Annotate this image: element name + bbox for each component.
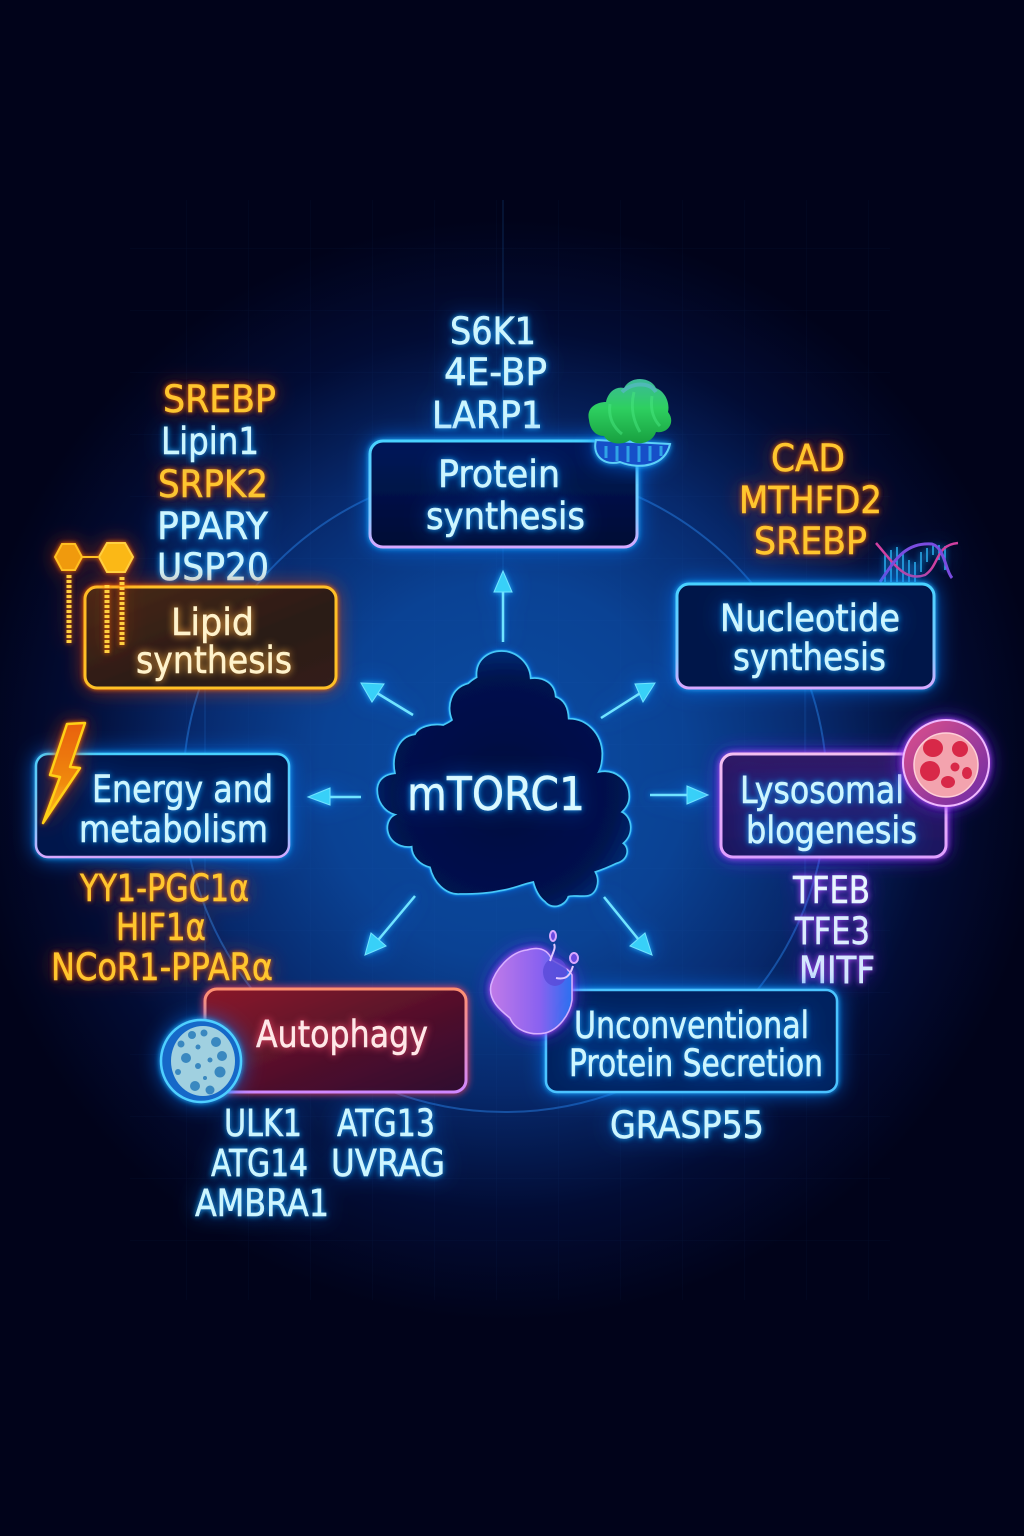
- icon: autophagosome: [161, 1020, 241, 1102]
- lipid synthesis targets: SRPK2: [158, 463, 268, 506]
- protein synthesis targets: LARP1: [432, 394, 543, 437]
- lipid synthesis targets: SREBP: [163, 378, 276, 421]
- arrow to protein synthesis: [494, 571, 512, 642]
- hub label: mTORC1: [407, 767, 585, 821]
- autophagy targets: UVRAG: [331, 1142, 445, 1185]
- panel: protein synthesis: [370, 310, 671, 547]
- lysosomal targets: [792, 869, 875, 992]
- energy targets: NCoR1-PPARα: [51, 946, 273, 989]
- arrow to autophagy: [365, 896, 415, 955]
- autophagy heading: Autophagy: [256, 1013, 428, 1056]
- nucleotide synthesis targets: SREBP: [754, 520, 867, 563]
- protein synthesis targets: 4E-BP: [444, 351, 547, 394]
- icon: lipid molecule: [55, 543, 133, 655]
- energy heading: [79, 768, 273, 851]
- autophagy targets: ATG14: [211, 1142, 308, 1185]
- panel: nucleotide synthesis: [677, 437, 958, 688]
- protein synthesis heading: [426, 453, 585, 538]
- protein synthesis heading: synthesis: [426, 495, 585, 538]
- nucleotide synthesis box: [677, 584, 934, 688]
- autophagy box: [205, 989, 466, 1092]
- secretion target: GRASP55: [610, 1104, 764, 1147]
- panel: lipid synthesis: [55, 378, 336, 688]
- nucleotide synthesis heading: [720, 597, 900, 679]
- lipid synthesis targets, blue: [157, 420, 269, 589]
- energy heading: metabolism: [79, 808, 268, 851]
- autophagy targets: ATG13: [337, 1102, 435, 1145]
- secretion box: [546, 990, 837, 1092]
- nucleotide synthesis heading: synthesis: [733, 636, 886, 679]
- secretion heading: Unconventional: [574, 1004, 809, 1047]
- lipid synthesis heading: synthesis: [136, 639, 292, 682]
- autophagy targets: [195, 1102, 445, 1225]
- lysosomal targets: MITF: [799, 949, 875, 992]
- energy heading: Energy and: [92, 768, 273, 811]
- energy targets: HIF1α: [116, 906, 206, 949]
- arrow to nucleotide synthesis: [601, 683, 655, 718]
- lipid synthesis box: [85, 587, 336, 688]
- arrow to unconventional protein secretion: [604, 897, 652, 955]
- faint ring and light streaks: [183, 200, 827, 1112]
- panel: autophagy: [161, 989, 466, 1225]
- lipid synthesis heading: Lipid: [171, 601, 254, 644]
- lipid synthesis targets, blue: Lipin1: [161, 420, 259, 463]
- protein synthesis heading: Protein: [438, 453, 560, 496]
- panel: lysosomal biogenesis: [721, 720, 989, 992]
- secretion heading: Protein Secretion: [569, 1042, 823, 1085]
- icon: secretory vesicle: [491, 931, 578, 1034]
- arrow to lipid synthesis: [361, 683, 413, 715]
- protein synthesis targets: S6K1: [450, 310, 536, 353]
- icon: ribosome: [588, 379, 671, 466]
- lipid synthesis targets: [158, 378, 276, 506]
- icon: DNA helix: [876, 543, 958, 582]
- protein synthesis targets: [432, 310, 547, 437]
- autophagy targets: AMBRA1: [195, 1182, 329, 1225]
- lysosomal targets: TFE3: [794, 910, 870, 953]
- nucleotide synthesis targets: CAD: [771, 437, 845, 480]
- nucleotide synthesis targets: MTHFD2: [739, 479, 882, 522]
- lysosomal heading: blogenesis: [746, 809, 917, 852]
- energy targets: YY1-PGC1α: [79, 867, 249, 910]
- panel: unconventional protein secretion: [491, 931, 837, 1147]
- nucleotide synthesis targets: [739, 437, 882, 563]
- energy targets: [51, 867, 273, 989]
- lysosomal heading: [740, 769, 917, 852]
- energy box: [36, 754, 289, 857]
- arrows from hub to each process: [308, 571, 708, 955]
- lysosomal targets: TFEB: [792, 869, 870, 912]
- icon: lysosome: [903, 720, 989, 806]
- lipid synthesis targets, blue: USP20: [157, 546, 269, 589]
- nucleotide synthesis heading: Nucleotide: [720, 597, 900, 640]
- lipid synthesis targets, blue: PPARY: [157, 505, 268, 548]
- icon: lightning bolt: [43, 723, 85, 823]
- secretion heading: [569, 1004, 823, 1085]
- arrow to energy and metabolism: [308, 788, 361, 805]
- autophagy targets: ULK1: [224, 1102, 302, 1145]
- lysosomal box: [721, 754, 946, 857]
- central hub: mTORC1 cloud: [377, 651, 631, 906]
- protein synthesis box: [370, 441, 637, 547]
- arrow to lysosomal biogenesis: [650, 786, 708, 804]
- lipid synthesis heading: [136, 601, 292, 682]
- lysosomal heading: Lysosomal: [740, 769, 904, 812]
- panel: energy and metabolism: [36, 723, 289, 989]
